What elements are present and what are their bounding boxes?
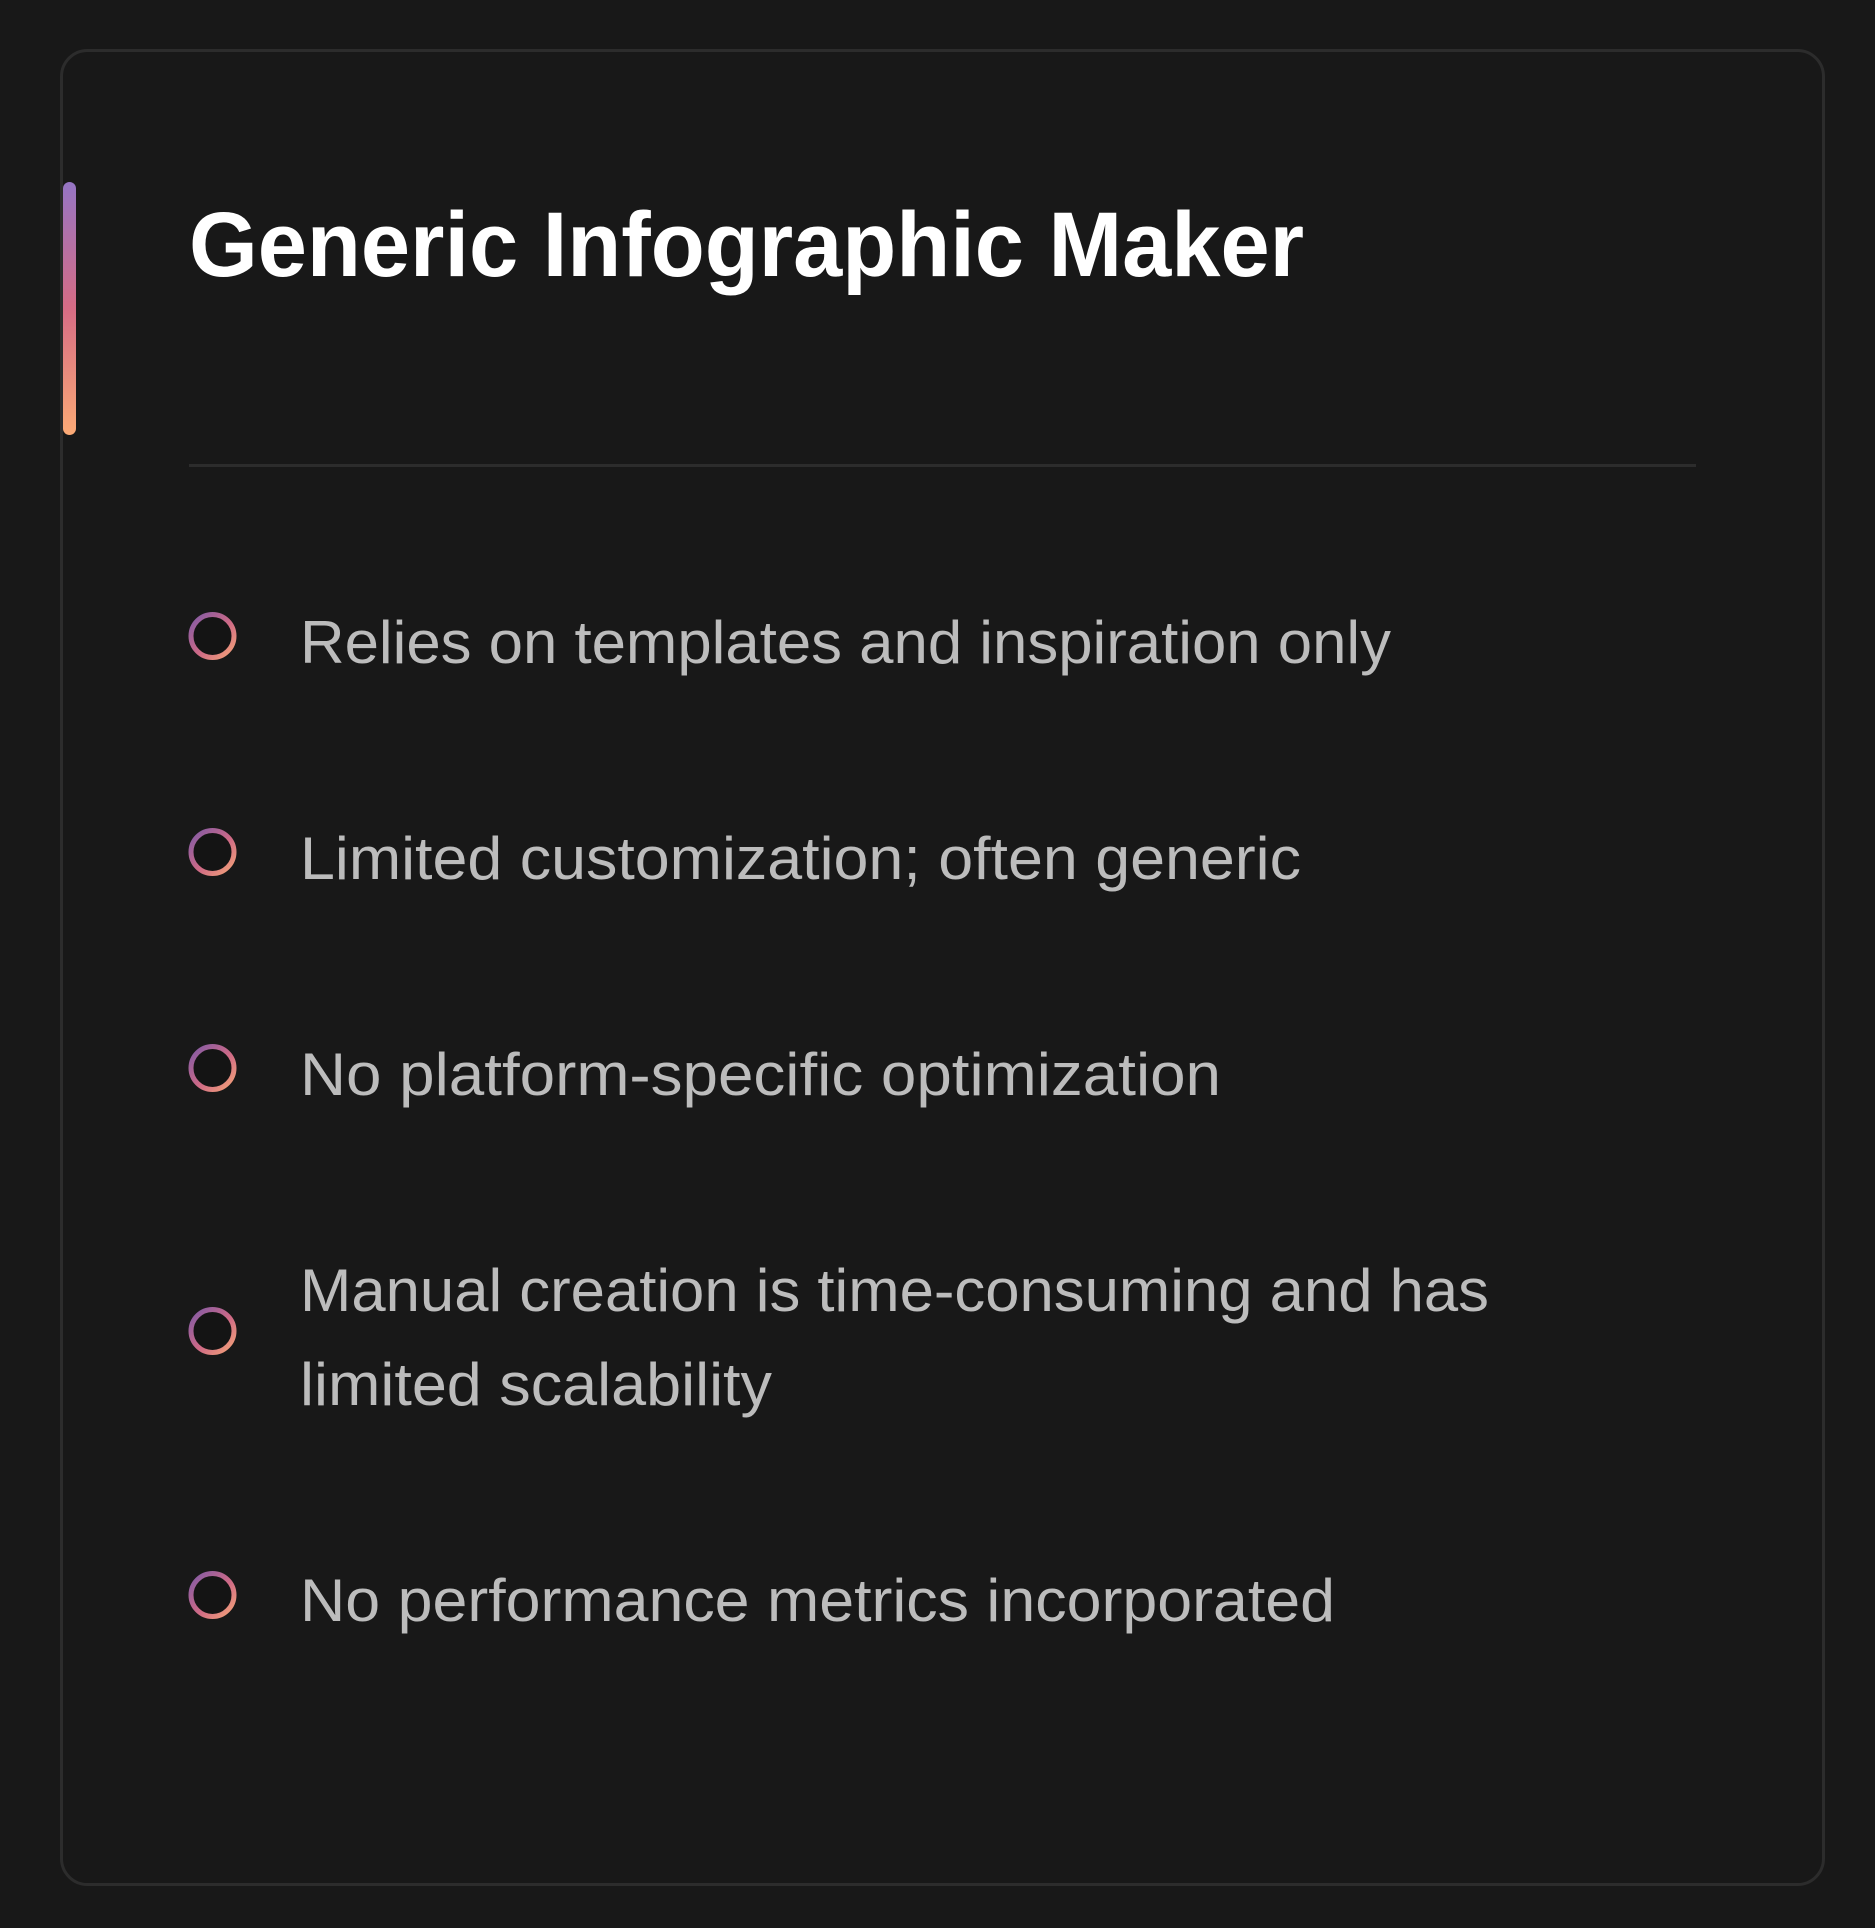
- list item 5: [191, 1567, 1335, 1634]
- icon: ring bullet 4: [191, 1310, 234, 1352]
- icon: ring bullet 5: [191, 1574, 234, 1616]
- list item 1: [191, 609, 1391, 676]
- icon: ring bullet 3: [191, 1046, 234, 1090]
- list item 3: [191, 1041, 1221, 1108]
- item text 4: limited scalability: [300, 1351, 772, 1418]
- icon: ring bullet 2: [191, 830, 234, 874]
- list item 4: [191, 1257, 1489, 1418]
- item text 3: No platform-specific optimization: [300, 1041, 1221, 1108]
- list item 2: [191, 825, 1301, 892]
- item text 5: No performance metrics incorporated: [300, 1567, 1335, 1634]
- icon: ring bullet 1: [191, 614, 234, 658]
- item text 2: Limited customization; often generic: [300, 825, 1301, 892]
- item text 4: Manual creation is time-consuming and has: [300, 1257, 1489, 1324]
- item text 4: [300, 1257, 1489, 1418]
- accent bar: [63, 182, 76, 435]
- item text 1: Relies on templates and inspiration only: [300, 609, 1391, 676]
- title: Generic Infographic Maker: [189, 194, 1304, 296]
